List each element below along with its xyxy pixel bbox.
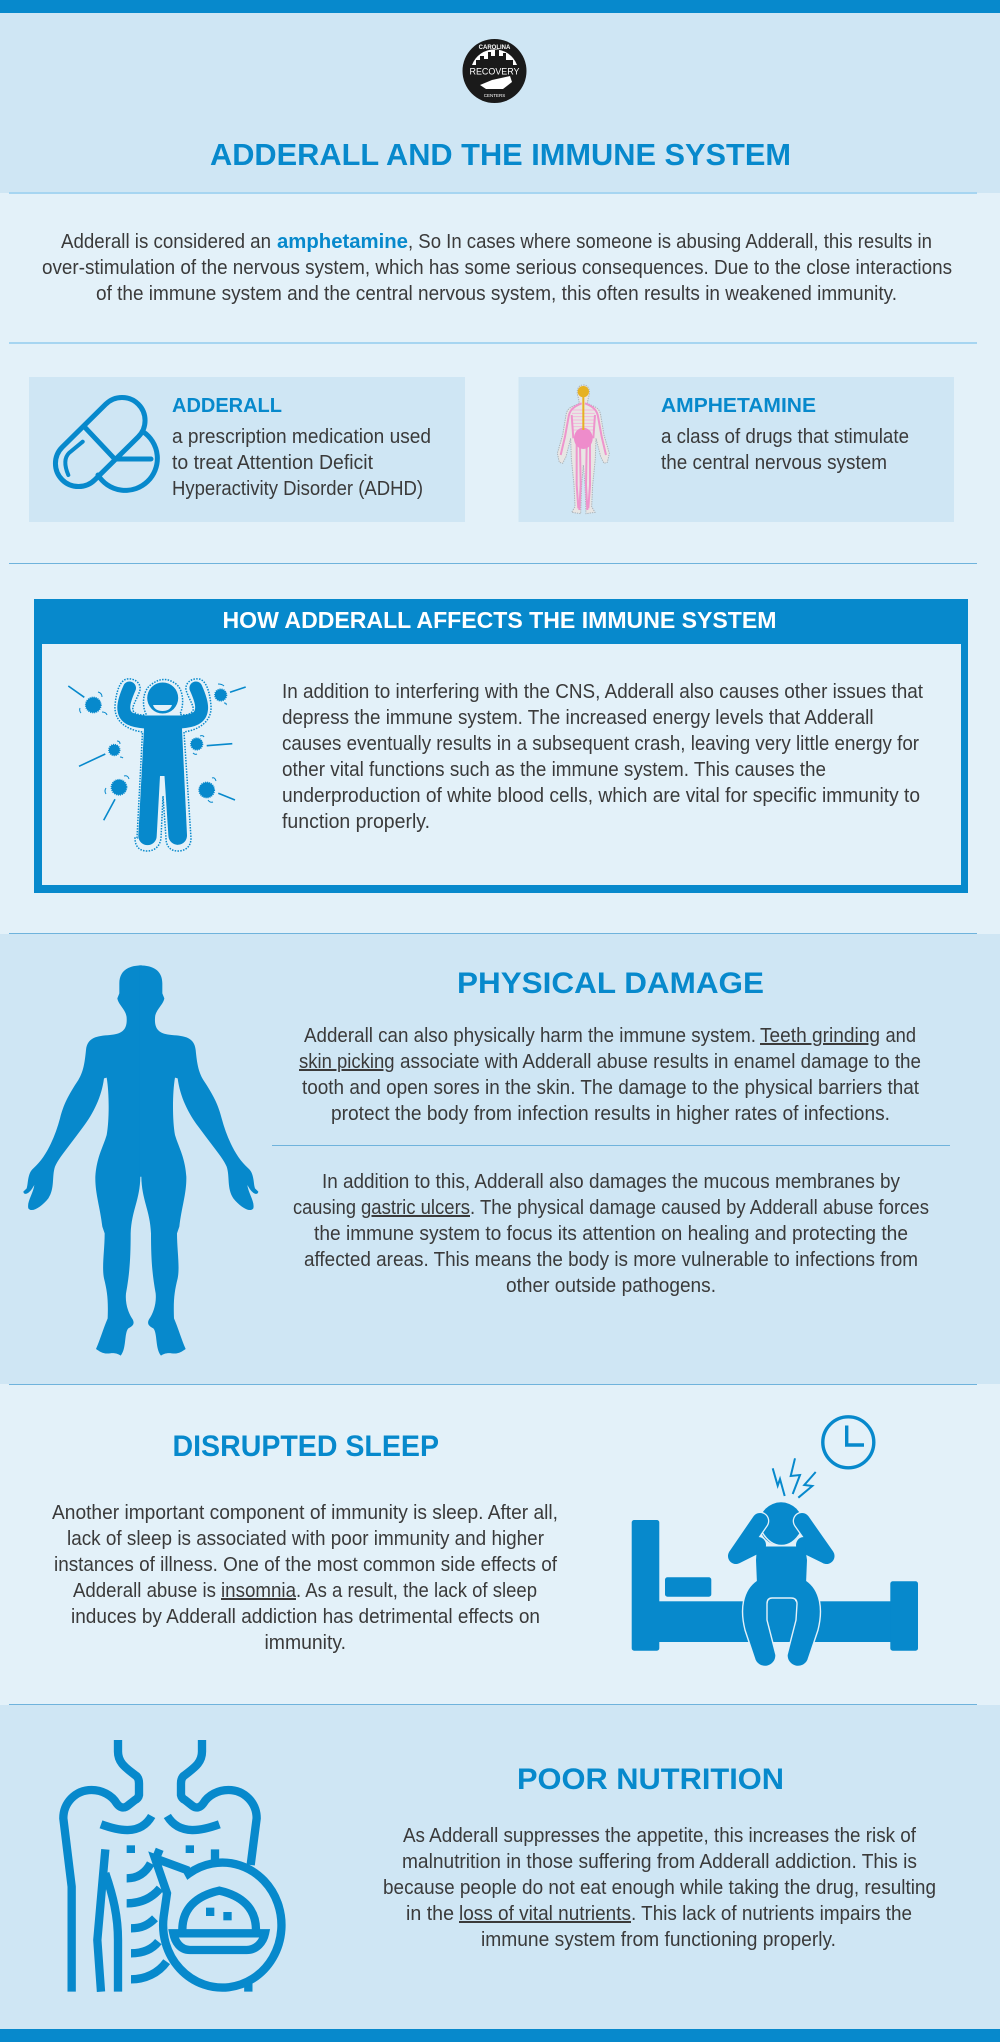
title: ADDERALL AND THE IMMUNE SYSTEM (210, 137, 791, 172)
intro text block: over-stimulation of the nervous system, which has some serious consequences. Due to the close interactions (42, 257, 952, 279)
panel heading: HOW ADDERALL AFFECTS THE IMMUNE SYSTEM (222, 607, 776, 633)
text block: physical damage paragraph 2: gastric ulcers (361, 1197, 470, 1219)
logo: Carolina Recovery Centers: CAROLINA (479, 45, 511, 51)
text block: disrupted sleep: insomnia (221, 1580, 297, 1602)
text block: physical damage paragraph 2: causing (293, 1197, 356, 1219)
text block: poor nutrition: because people do not eat enough while taking the drug, resulting (383, 1877, 936, 1899)
panel body text: causes eventually results in a subsequent crash, leaving very little energy for (282, 733, 919, 755)
icon: lightning bolts (773, 1458, 816, 1498)
icon: body with food bubble (63, 1740, 281, 1992)
panel: how Adderall affects the immune system (34, 599, 968, 893)
text block: poor nutrition: malnutrition in those suffering from Adderall addiction. This is (402, 1851, 917, 1873)
text block: physical damage paragraph 1 (299, 1025, 921, 1125)
text block: disrupted sleep: induces by Adderall addiction has detrimental effects on (71, 1606, 540, 1628)
panel body text: underproduction of white blood cells, which are vital for specific immunity to (282, 785, 920, 807)
definition text: Adderall (172, 426, 431, 500)
text block: poor nutrition: . This lack of nutrients impairs the (631, 1903, 912, 1925)
text block: physical damage paragraph 1: Teeth grinding (760, 1025, 880, 1047)
heading: poor nutrition: POOR NUTRITION (517, 1763, 784, 1796)
text block: physical damage paragraph 2: . The physical damage caused by Adderall abuse forces (470, 1197, 929, 1219)
text block: physical damage paragraph 2 (293, 1171, 929, 1297)
text block: physical damage paragraph 1: Adderall can also physically harm the immune system. (304, 1025, 756, 1047)
text block: physical damage paragraph 2: the immune system to focus its attention on healing and protecting the (314, 1223, 908, 1245)
intro text block: of the immune system and the central nervous system, this often results in weakened immunity. (96, 283, 897, 305)
heading: disrupted sleep: DISRUPTED SLEEP (172, 1430, 439, 1463)
logo: Carolina Recovery Centers: RECOVERY (470, 66, 520, 76)
text block: disrupted sleep: immunity. (264, 1632, 346, 1654)
text block: disrupted sleep: . As a result, the lack of sleep (296, 1580, 537, 1602)
icon: body silhouette (23, 965, 258, 1356)
logo: Carolina Recovery Centers (462, 39, 526, 103)
text block: disrupted sleep: Another important component of immunity is sleep. After all, (52, 1502, 558, 1524)
heading: Adderall: ADDERALL (172, 395, 282, 417)
definition text: Adderall: a prescription medication used (172, 426, 431, 448)
text block: physical damage paragraph 2: In addition to this, Adderall also damages the mucous membranes by (322, 1171, 900, 1193)
heading: physical damage: PHYSICAL DAMAGE (457, 967, 764, 1000)
panel body text (282, 681, 923, 833)
panel: Adderall definition (29, 377, 465, 522)
panel: Amphetamine definition (518, 377, 954, 522)
text block: disrupted sleep: lack of sleep is associated with poor immunity and higher (67, 1528, 544, 1550)
definition text: Amphetamine: a class of drugs that stimulate (661, 426, 909, 448)
intro text block: Adderall is considered an (61, 231, 271, 253)
intro text block: amphetamine (277, 231, 408, 253)
text block: poor nutrition (383, 1825, 936, 1951)
text block: poor nutrition: immune system from functioning properly. (481, 1929, 836, 1951)
text block: poor nutrition: As Adderall suppresses the appetite, this increases the risk of (403, 1825, 916, 1847)
panel body text: function properly. (282, 811, 430, 833)
text block: physical damage paragraph 2: affected areas. This means the body is more vulnerable to infections from (304, 1249, 918, 1271)
panel body text: other vital functions such as the immune system. This causes the (282, 759, 826, 781)
intro text block: , So In cases where someone is abusing Adderall, this results in (408, 231, 932, 253)
panel body text: depress the immune system. The increased energy levels that Adderall (282, 707, 874, 729)
panel body text: In addition to interfering with the CNS, Adderall also causes other issues that (282, 681, 923, 703)
heading: Amphetamine: AMPHETAMINE (661, 395, 816, 417)
text block: physical damage paragraph 1: protect the body from infection results in higher rates of infections. (331, 1103, 890, 1125)
text block: poor nutrition: in the (406, 1903, 454, 1925)
definition text: Amphetamine (661, 426, 909, 474)
icon: insomnia person on bed with clock (632, 1417, 918, 1666)
text block: disrupted sleep (52, 1502, 558, 1654)
intro text block (42, 231, 952, 305)
definition text: Adderall: Hyperactivity Disorder (ADHD) (172, 478, 423, 500)
text block: physical damage paragraph 1: associate with Adderall abuse results in enamel damage to the (400, 1051, 921, 1073)
text block: physical damage paragraph 1: and (886, 1025, 916, 1047)
icon: nervous system body (557, 385, 609, 514)
icon: person with germs (68, 679, 246, 851)
icon: pills (55, 397, 157, 490)
text block: physical damage paragraph 1: skin picking (299, 1051, 394, 1073)
text block: physical damage paragraph 2: other outside pathogens. (506, 1275, 716, 1297)
logo: Carolina Recovery Centers: CENTERS (484, 93, 505, 98)
definition text: Adderall: to treat Attention Deficit (172, 452, 373, 474)
text block: disrupted sleep: instances of illness. One of the most common side effects of (54, 1554, 557, 1576)
text block: poor nutrition: loss of vital nutrients (459, 1903, 631, 1925)
text block: physical damage paragraph 1: tooth and open sores in the skin. The damage to the physical barriers that (302, 1077, 919, 1099)
text block: disrupted sleep: Adderall abuse is (73, 1580, 216, 1602)
definition text: Amphetamine: the central nervous system (661, 452, 887, 474)
icon: clock (823, 1417, 874, 1468)
